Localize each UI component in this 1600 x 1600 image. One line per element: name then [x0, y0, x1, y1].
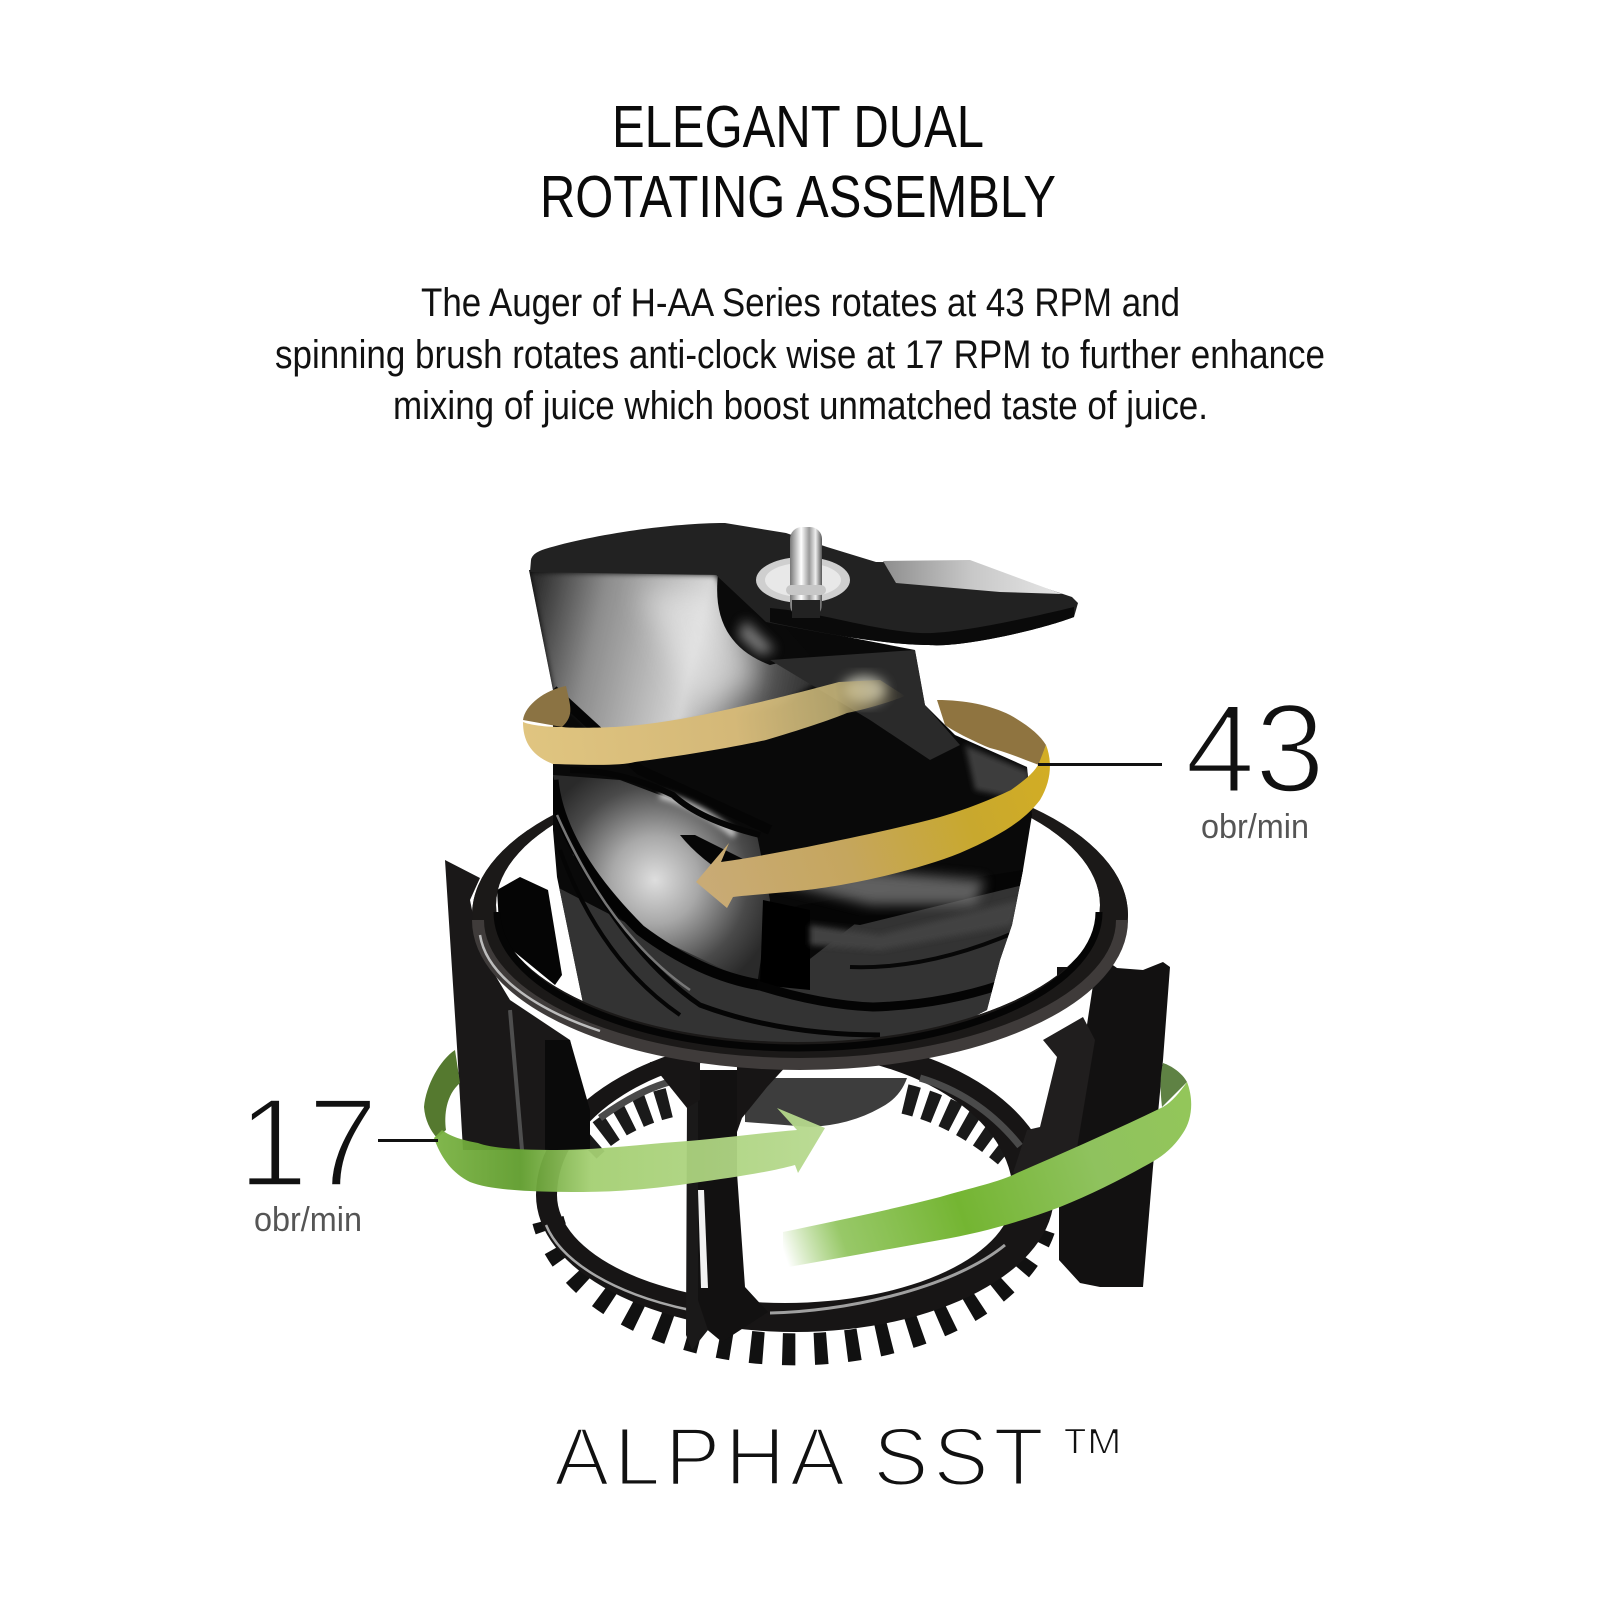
auger top blades [530, 523, 1078, 645]
right paddle [1013, 962, 1170, 1287]
title: ELEGANT DUAL [612, 94, 984, 160]
description text block: The Auger of H-AA Series rotates at 43 RPM and [421, 281, 1180, 325]
left paddle [445, 860, 592, 1150]
title: ROTATING ASSEMBLY [540, 164, 1056, 230]
speed label: 17 obr/min: 17 [238, 1072, 378, 1213]
description text block: mixing of juice which boost unmatched taste of juice. [393, 384, 1208, 428]
product illustration: dual rotating assembly [378, 520, 1191, 1350]
product name: ALPHA SST [554, 1410, 1044, 1503]
speed label: 17 obr/min: obr/min [254, 1201, 362, 1239]
leader line 17 [378, 1139, 438, 1142]
leader line 43 [1038, 763, 1162, 766]
title [540, 94, 1056, 230]
support ring back [472, 763, 1128, 1067]
central post [650, 1062, 790, 1350]
support ring front [472, 830, 1128, 1070]
auger nose [745, 1078, 907, 1127]
yellow ribbon [523, 680, 1050, 908]
description text block [275, 281, 1325, 428]
speed label: 43 obr/min: 43 [1185, 678, 1325, 819]
green ribbon [424, 1050, 1191, 1268]
description text block: spinning brush rotates anti-clock wise at 17 RPM to further enhance [275, 333, 1325, 377]
speed label: 43 obr/min: obr/min [1201, 808, 1309, 846]
auger body [529, 570, 1032, 1042]
product name: ™ [1058, 1414, 1126, 1490]
gear ring with teeth [536, 1035, 1054, 1349]
